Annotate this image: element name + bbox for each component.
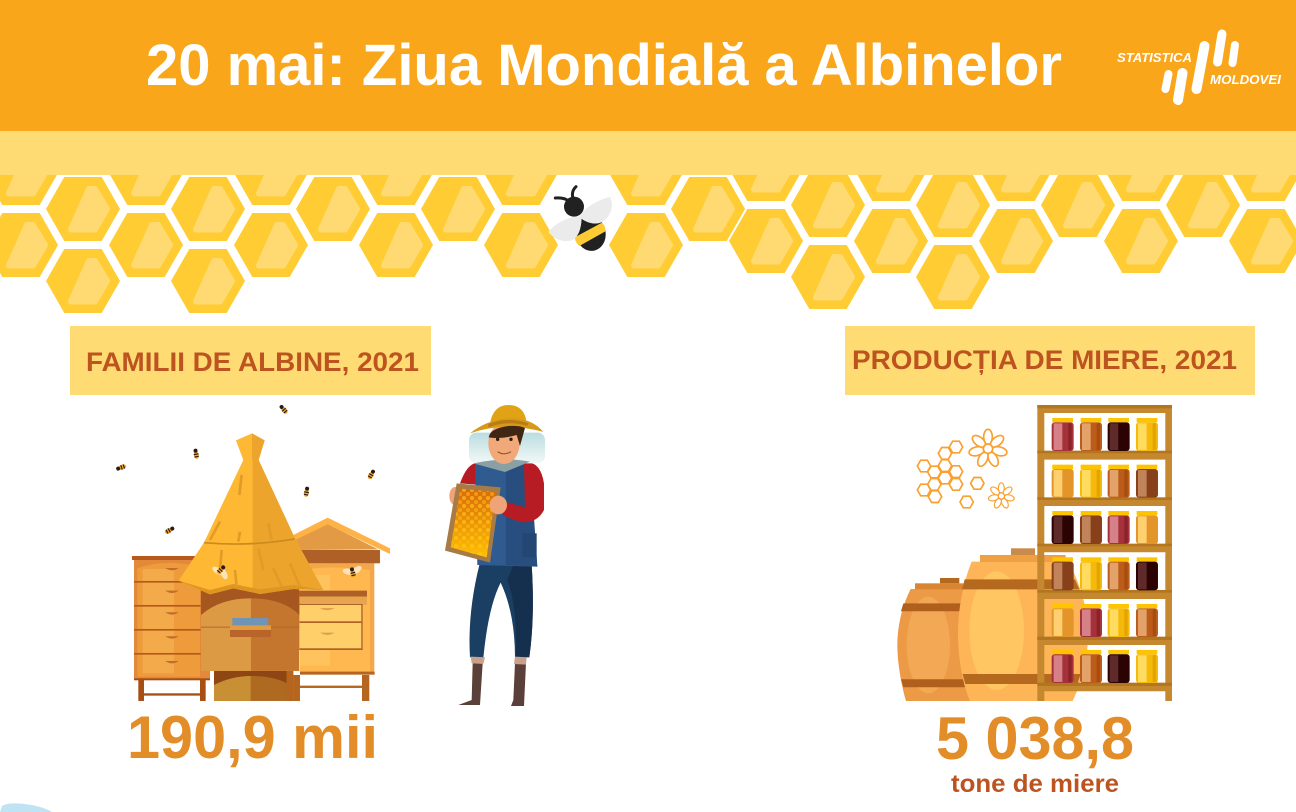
header bar bbox=[0, 0, 1296, 131]
panel: familii de albine heading: FAMILII DE ALBINE, 2021 bbox=[86, 347, 419, 377]
number: bee families: 190,9 mii bbox=[127, 704, 378, 771]
logo: Statistica Moldovei: STATISTICA bbox=[1117, 51, 1192, 65]
number: honey production: 5 038,8 bbox=[936, 705, 1134, 772]
panel: productia de miere heading: PRODUCȚIA DE MIERE, 2021 bbox=[852, 345, 1237, 375]
caption: tone de miere: tone de miere bbox=[951, 770, 1119, 798]
illustration: beekeeper bbox=[445, 405, 545, 706]
logo: Statistica Moldovei: MOLDOVEI bbox=[1210, 73, 1282, 87]
light yellow band bbox=[0, 131, 1296, 175]
shelf with honey jars bbox=[1037, 405, 1172, 701]
panel: familii de albine heading bbox=[70, 326, 431, 395]
illustration: beehives bbox=[115, 404, 390, 701]
illustration: honey barrels bbox=[897, 405, 1172, 701]
title: 20 mai: Ziua Mondială a Albinelor bbox=[146, 33, 1062, 98]
icon: honeycomb and flower outlines bbox=[917, 429, 1015, 509]
panel: productia de miere heading bbox=[845, 326, 1255, 395]
honeycomb band bbox=[0, 175, 1296, 313]
decorative blue corner shape bbox=[0, 803, 52, 812]
icon: bee bbox=[548, 187, 612, 253]
logo: Statistica Moldovei bbox=[1117, 34, 1282, 100]
